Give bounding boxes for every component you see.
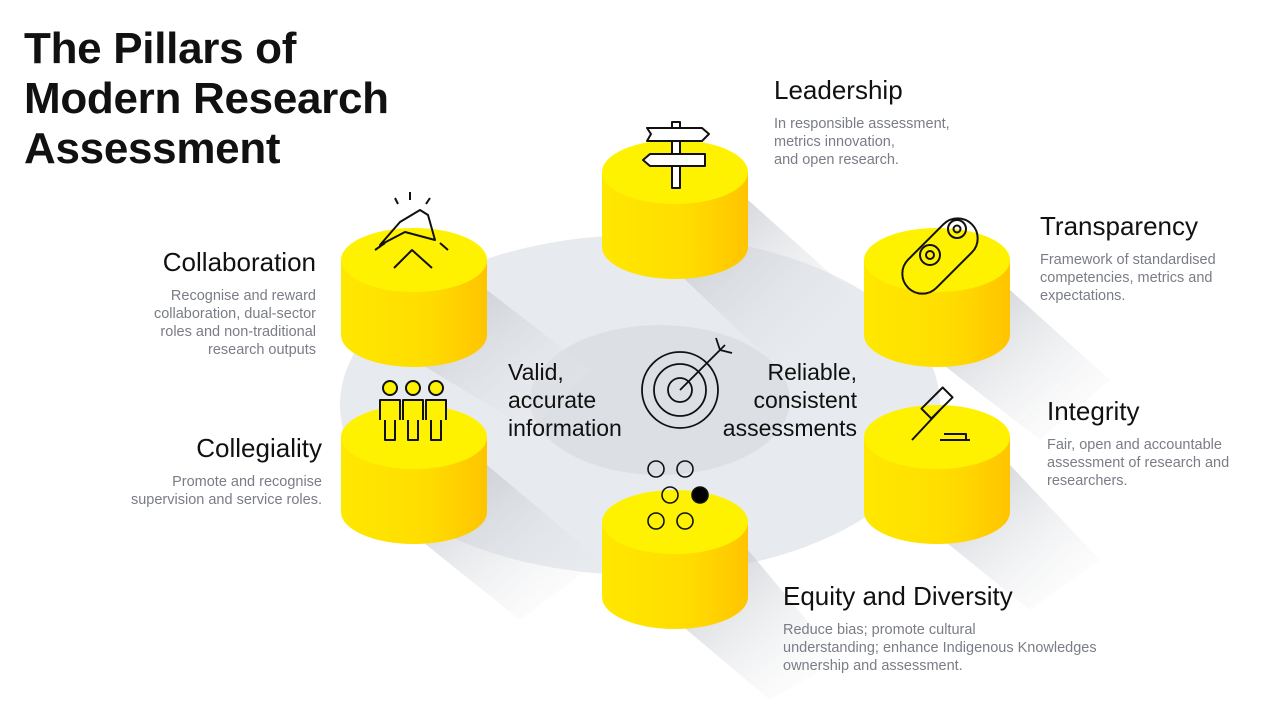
text: integrity: researchers. — [1047, 473, 1128, 489]
title — [24, 24, 389, 173]
text: equity — [783, 581, 1097, 674]
title: Assessment — [24, 124, 280, 173]
text: transparency — [1040, 211, 1216, 304]
center text left: information — [508, 415, 622, 441]
text: collegiality: Promote and recognise — [172, 474, 322, 490]
text: leadership: In responsible assessment, — [774, 116, 950, 132]
text: transparency: Transparency — [1040, 211, 1198, 241]
icon: dots — [648, 461, 708, 529]
text: integrity: Fair, open and accountable — [1047, 437, 1222, 453]
cylinder: collaboration — [341, 228, 487, 367]
icon: signpost — [643, 122, 709, 188]
text: collaboration — [154, 247, 316, 358]
center text right: Reliable, — [768, 359, 857, 385]
center text right: assessments — [723, 415, 857, 441]
text: collaboration: collaboration, dual-sector — [154, 306, 316, 322]
text: equity: understanding; enhance Indigenous Knowledges — [783, 640, 1097, 656]
center text right: consistent — [753, 387, 857, 413]
center text left — [508, 359, 622, 441]
center text left: Valid, — [508, 359, 564, 385]
text: transparency: competencies, metrics and — [1040, 270, 1212, 286]
title: Modern Research — [24, 74, 389, 123]
cylinder: transparency — [864, 228, 1010, 367]
text: leadership — [774, 75, 950, 168]
text: equity: Equity and Diversity — [783, 581, 1013, 611]
cylinder: integrity — [864, 405, 1010, 544]
icon: handshake — [375, 192, 448, 268]
text: leadership: Leadership — [774, 75, 903, 105]
text: collegiality — [131, 433, 322, 508]
text: collaboration: research outputs — [208, 342, 316, 358]
text: transparency: expectations. — [1040, 288, 1125, 304]
text: leadership: and open research. — [774, 152, 899, 168]
icon: gavel — [912, 387, 970, 440]
shadows — [414, 200, 1110, 700]
text: transparency: Framework of standardised — [1040, 252, 1216, 268]
text: collaboration: Collaboration — [163, 247, 316, 277]
icon: target — [642, 338, 732, 428]
cylinder: collegiality — [341, 405, 487, 544]
icon: gears — [894, 210, 986, 302]
text: collaboration: roles and non-traditional — [160, 324, 316, 340]
text: integrity — [1047, 396, 1229, 489]
cylinder: equity — [602, 490, 748, 629]
cylinder: leadership — [602, 140, 748, 279]
text: integrity: assessment of research and — [1047, 455, 1229, 471]
center text left: accurate — [508, 387, 596, 413]
text: collegiality: Collegiality — [196, 433, 322, 463]
icon: people — [380, 381, 446, 440]
center text right — [723, 359, 857, 441]
text: integrity: Integrity — [1047, 396, 1140, 426]
text: equity: ownership and assessment. — [783, 658, 963, 674]
text: leadership: metrics innovation, — [774, 134, 895, 150]
text: collegiality: supervision and service roles. — [131, 492, 322, 508]
background ellipses — [340, 235, 940, 575]
text: equity: Reduce bias; promote cultural — [783, 622, 976, 638]
title: The Pillars of — [24, 24, 296, 73]
text: collaboration: Recognise and reward — [171, 288, 316, 304]
